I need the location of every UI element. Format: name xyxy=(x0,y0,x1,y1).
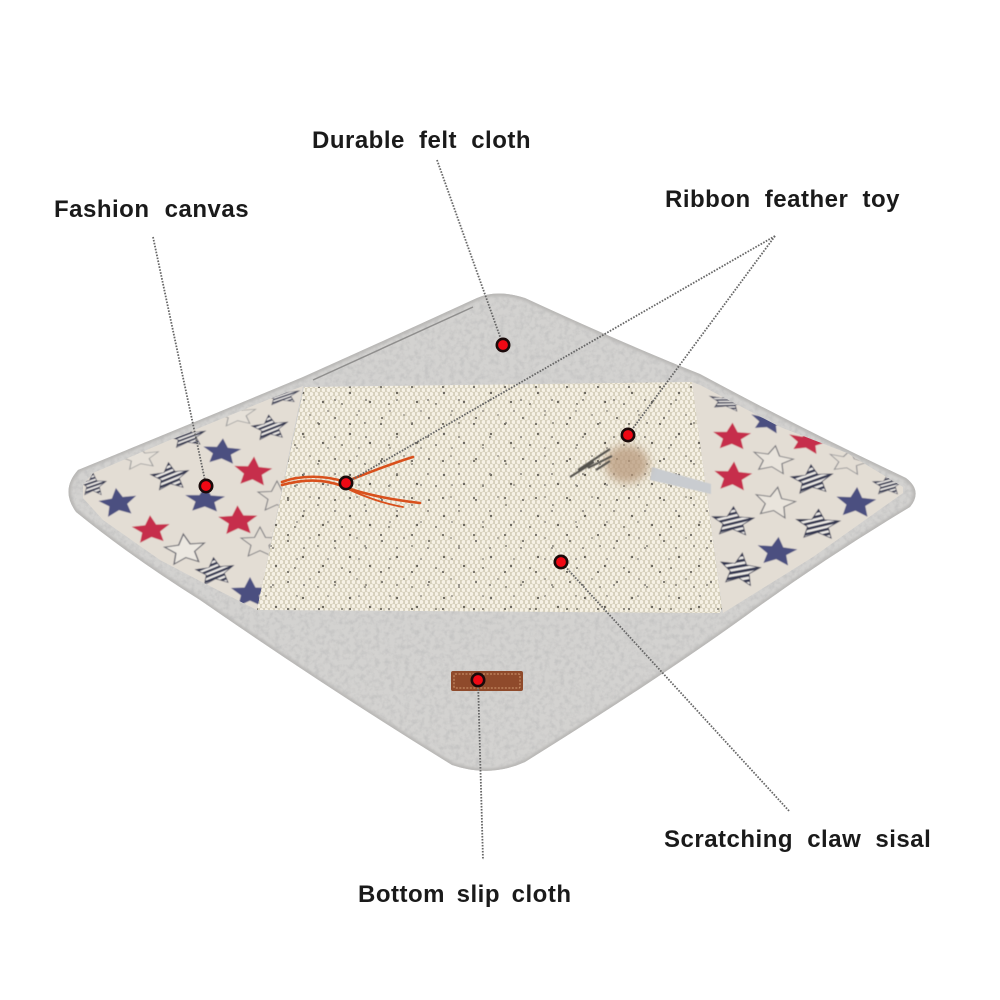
icon: feather toy xyxy=(570,445,711,494)
marker: felt cloth xyxy=(497,339,509,351)
panel: left canvas with stars xyxy=(80,380,310,615)
marker: ribbon xyxy=(340,477,352,489)
felt base xyxy=(60,285,925,780)
label: Ribbon feather toy: Ribbon feather toy xyxy=(665,186,900,213)
marker: fashion canvas xyxy=(200,480,212,492)
icon: orange ribbon xyxy=(282,457,420,507)
marker: sisal xyxy=(555,556,567,568)
label: Durable felt cloth: Durable felt cloth xyxy=(312,127,531,154)
icon: leather tag xyxy=(451,671,523,691)
label: Scratching claw sisal: Scratching claw sisal xyxy=(664,826,931,853)
marker: bottom slip cloth xyxy=(472,674,484,686)
panel: sisal scratching surface xyxy=(257,382,722,613)
leader lines xyxy=(153,160,790,860)
label: Fashion canvas: Fashion canvas xyxy=(54,196,249,223)
panel: right canvas with stars xyxy=(688,380,913,620)
scratching mat xyxy=(60,285,925,780)
label: Bottom slip cloth: Bottom slip cloth xyxy=(358,881,571,908)
marker: feather toy xyxy=(622,429,634,441)
